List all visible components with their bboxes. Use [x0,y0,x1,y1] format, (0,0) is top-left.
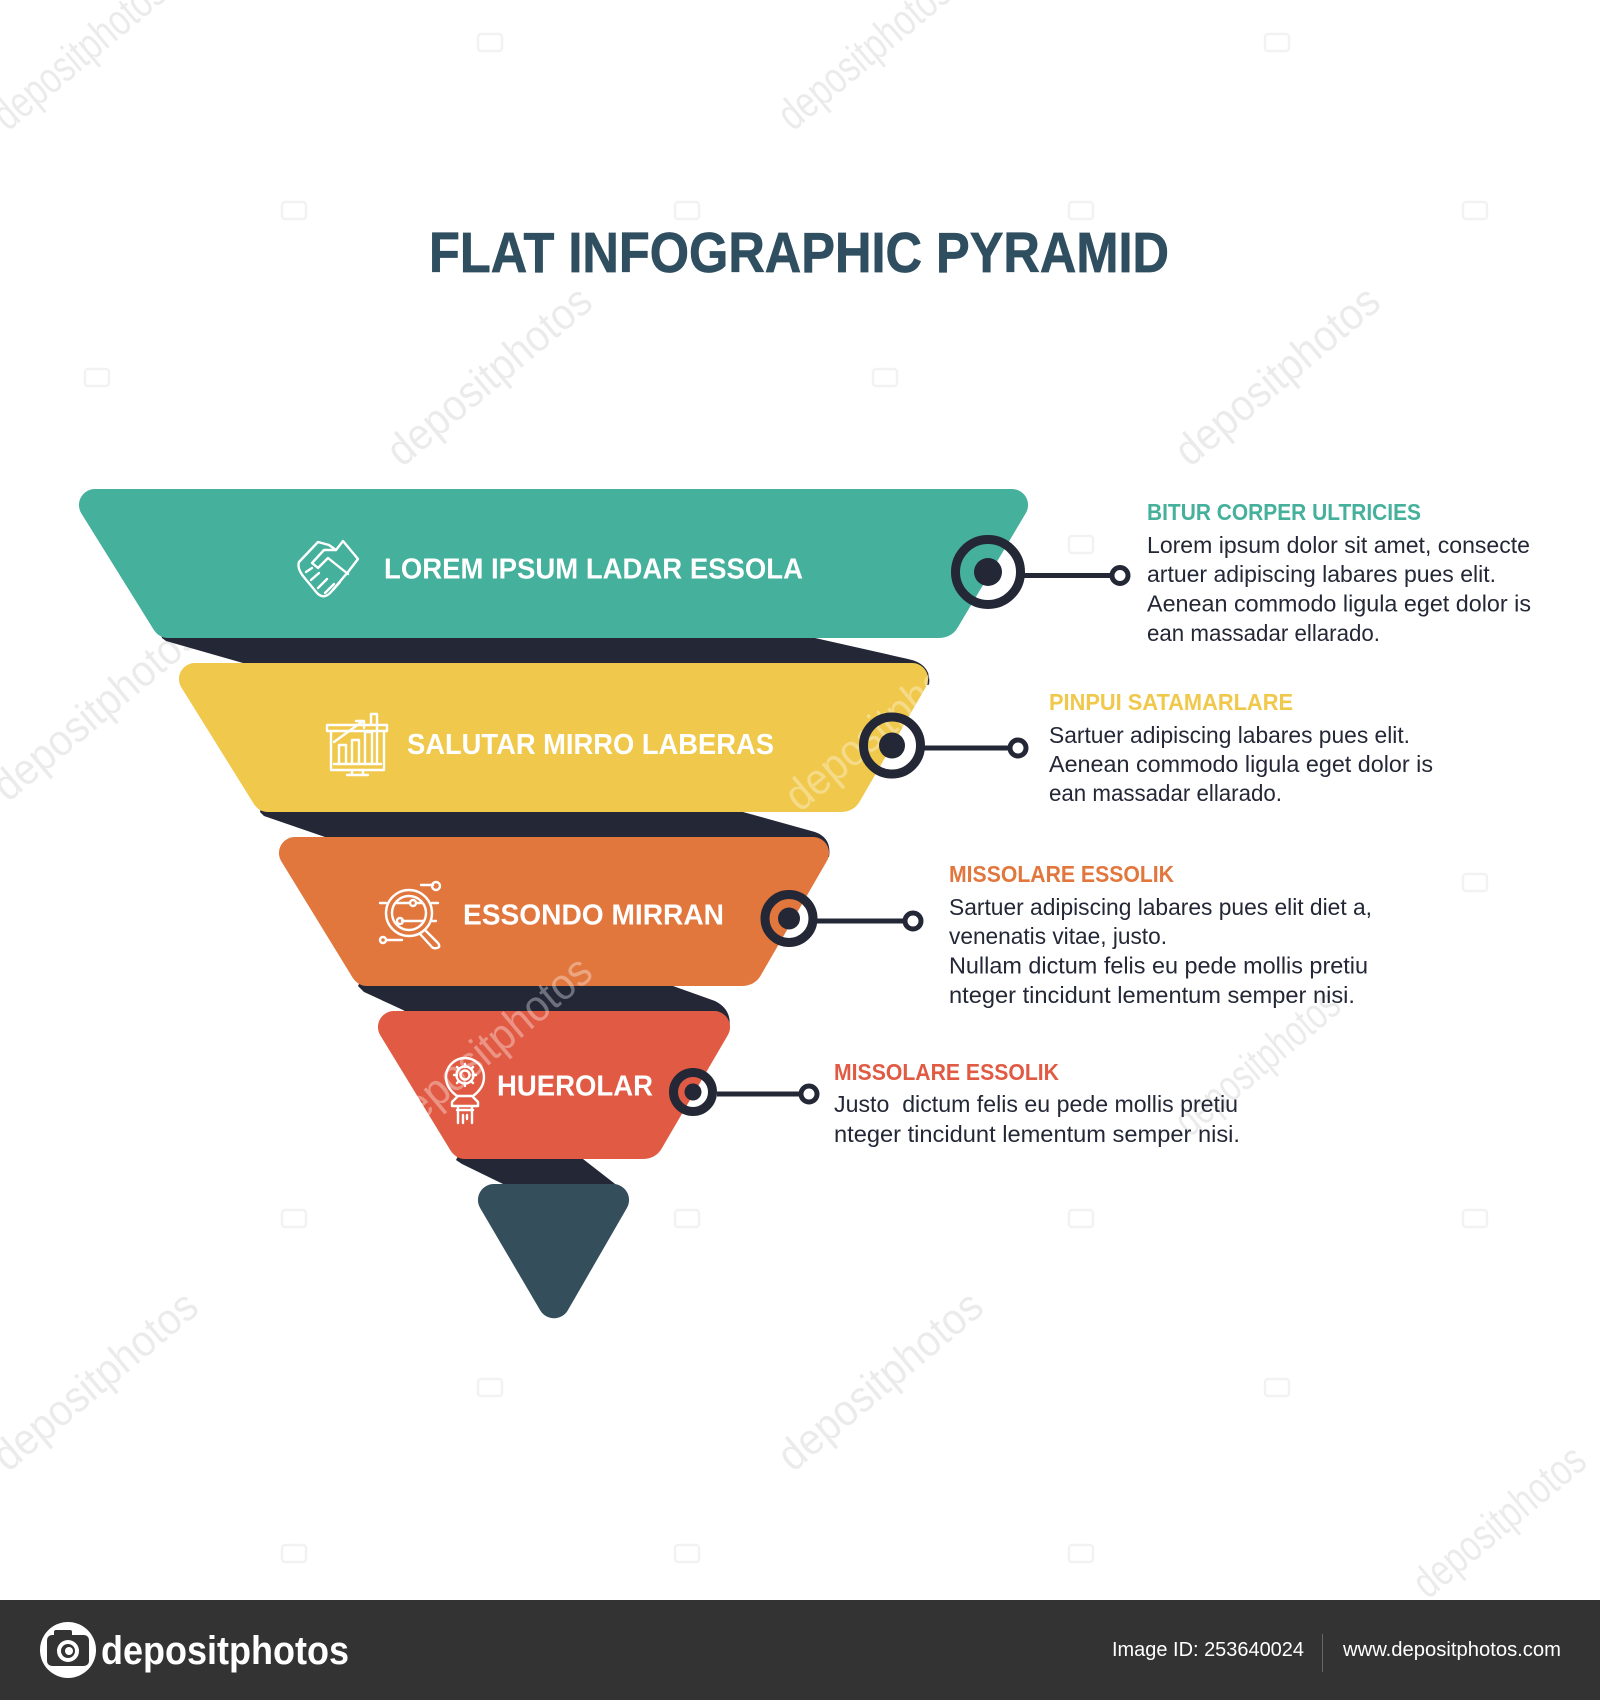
icon: gear lightbulb [446,1058,484,1123]
watermark background: depositphotos [1165,980,1350,1146]
text block 3 [949,861,1372,1008]
text block 4 [834,1059,1240,1147]
text block 2: ean massadar ellarado. [1049,780,1282,806]
watermark over funnel: depositphotos [775,621,999,821]
tier 1 label: LOREM IPSUM LADAR ESSOLA [384,554,803,586]
text block 3: venenatis vitae, justo. [949,923,1167,949]
text block 2: PINPUI SATAMARLARE [1049,689,1293,715]
tier 2 yellow [179,663,928,812]
watermark over funnel: depositphotos [377,946,601,1146]
text block 4: MISSOLARE ESSOLIK [834,1059,1059,1085]
title: FLAT INFOGRAPHIC PYRAMID [429,221,1169,285]
website: www.depositphotos.com [1342,1639,1561,1661]
icon: handshake [298,541,358,596]
text block 3: Sartuer adipiscing labares pues elit diet a, [949,894,1372,920]
text block 2 [1049,689,1433,806]
text block 4: Justo dictum felis eu pede mollis pretiu [834,1091,1238,1117]
dark connector band 2 [260,804,829,857]
text block 1: Aenean commodo ligula eget dolor is [1147,590,1531,616]
text block 1: BITUR CORPER ULTRICIES [1147,499,1421,525]
marker 4 [674,1072,817,1112]
tier 3 label: ESSONDO MIRRAN [463,900,724,932]
text block 3: Nullam dictum felis eu pede mollis pretiu [949,952,1368,978]
text block 2: Aenean commodo ligula eget dolor is [1049,751,1433,777]
watermark background: depositphotos [768,1281,992,1481]
text block 1: Lorem ipsum dolor sit amet, consecte [1147,532,1530,558]
dark connector band 3 [358,978,730,1030]
text block 1: ean massadar ellarado. [1147,620,1380,646]
marker 2 [864,717,1026,774]
tier 4 red [378,1011,730,1159]
footer logo icon [40,1622,96,1678]
dark connector band 4 [456,1152,628,1194]
text block 3: MISSOLARE ESSOLIK [949,861,1174,887]
tier 4 label: HUEROLAR [497,1070,653,1102]
icon: magnifier with sliders [380,882,440,948]
watermark over funnel [377,621,999,1146]
watermark background: depositphotos [1165,276,1389,476]
text block 3: nteger tincidunt lementum semper nisi. [949,982,1355,1008]
text block 2: Sartuer adipiscing labares pues elit. [1049,722,1410,748]
tier 3 orange [279,837,829,986]
tier 1 teal [79,489,1028,638]
image id: Image ID: 253640024 [1112,1639,1304,1661]
icon: presentation chart [327,714,387,775]
text block 1: artuer adipiscing labares pues elit. [1147,561,1496,587]
bottom triangle [478,1184,629,1318]
marker 1 [956,540,1128,604]
text block 1 [1147,499,1531,646]
text block 4: nteger tincidunt lementum semper nisi. [834,1121,1240,1147]
dark connector band 1 [160,630,929,685]
footer bar [0,1600,1600,1700]
marker 3 [765,894,921,942]
watermark background: depositphotos [377,276,601,476]
funnel pyramid [79,489,1028,1318]
tier 2 label: SALUTAR MIRRO LABERAS [407,729,774,761]
footer logo wordmark: depositphotos [101,1629,349,1673]
